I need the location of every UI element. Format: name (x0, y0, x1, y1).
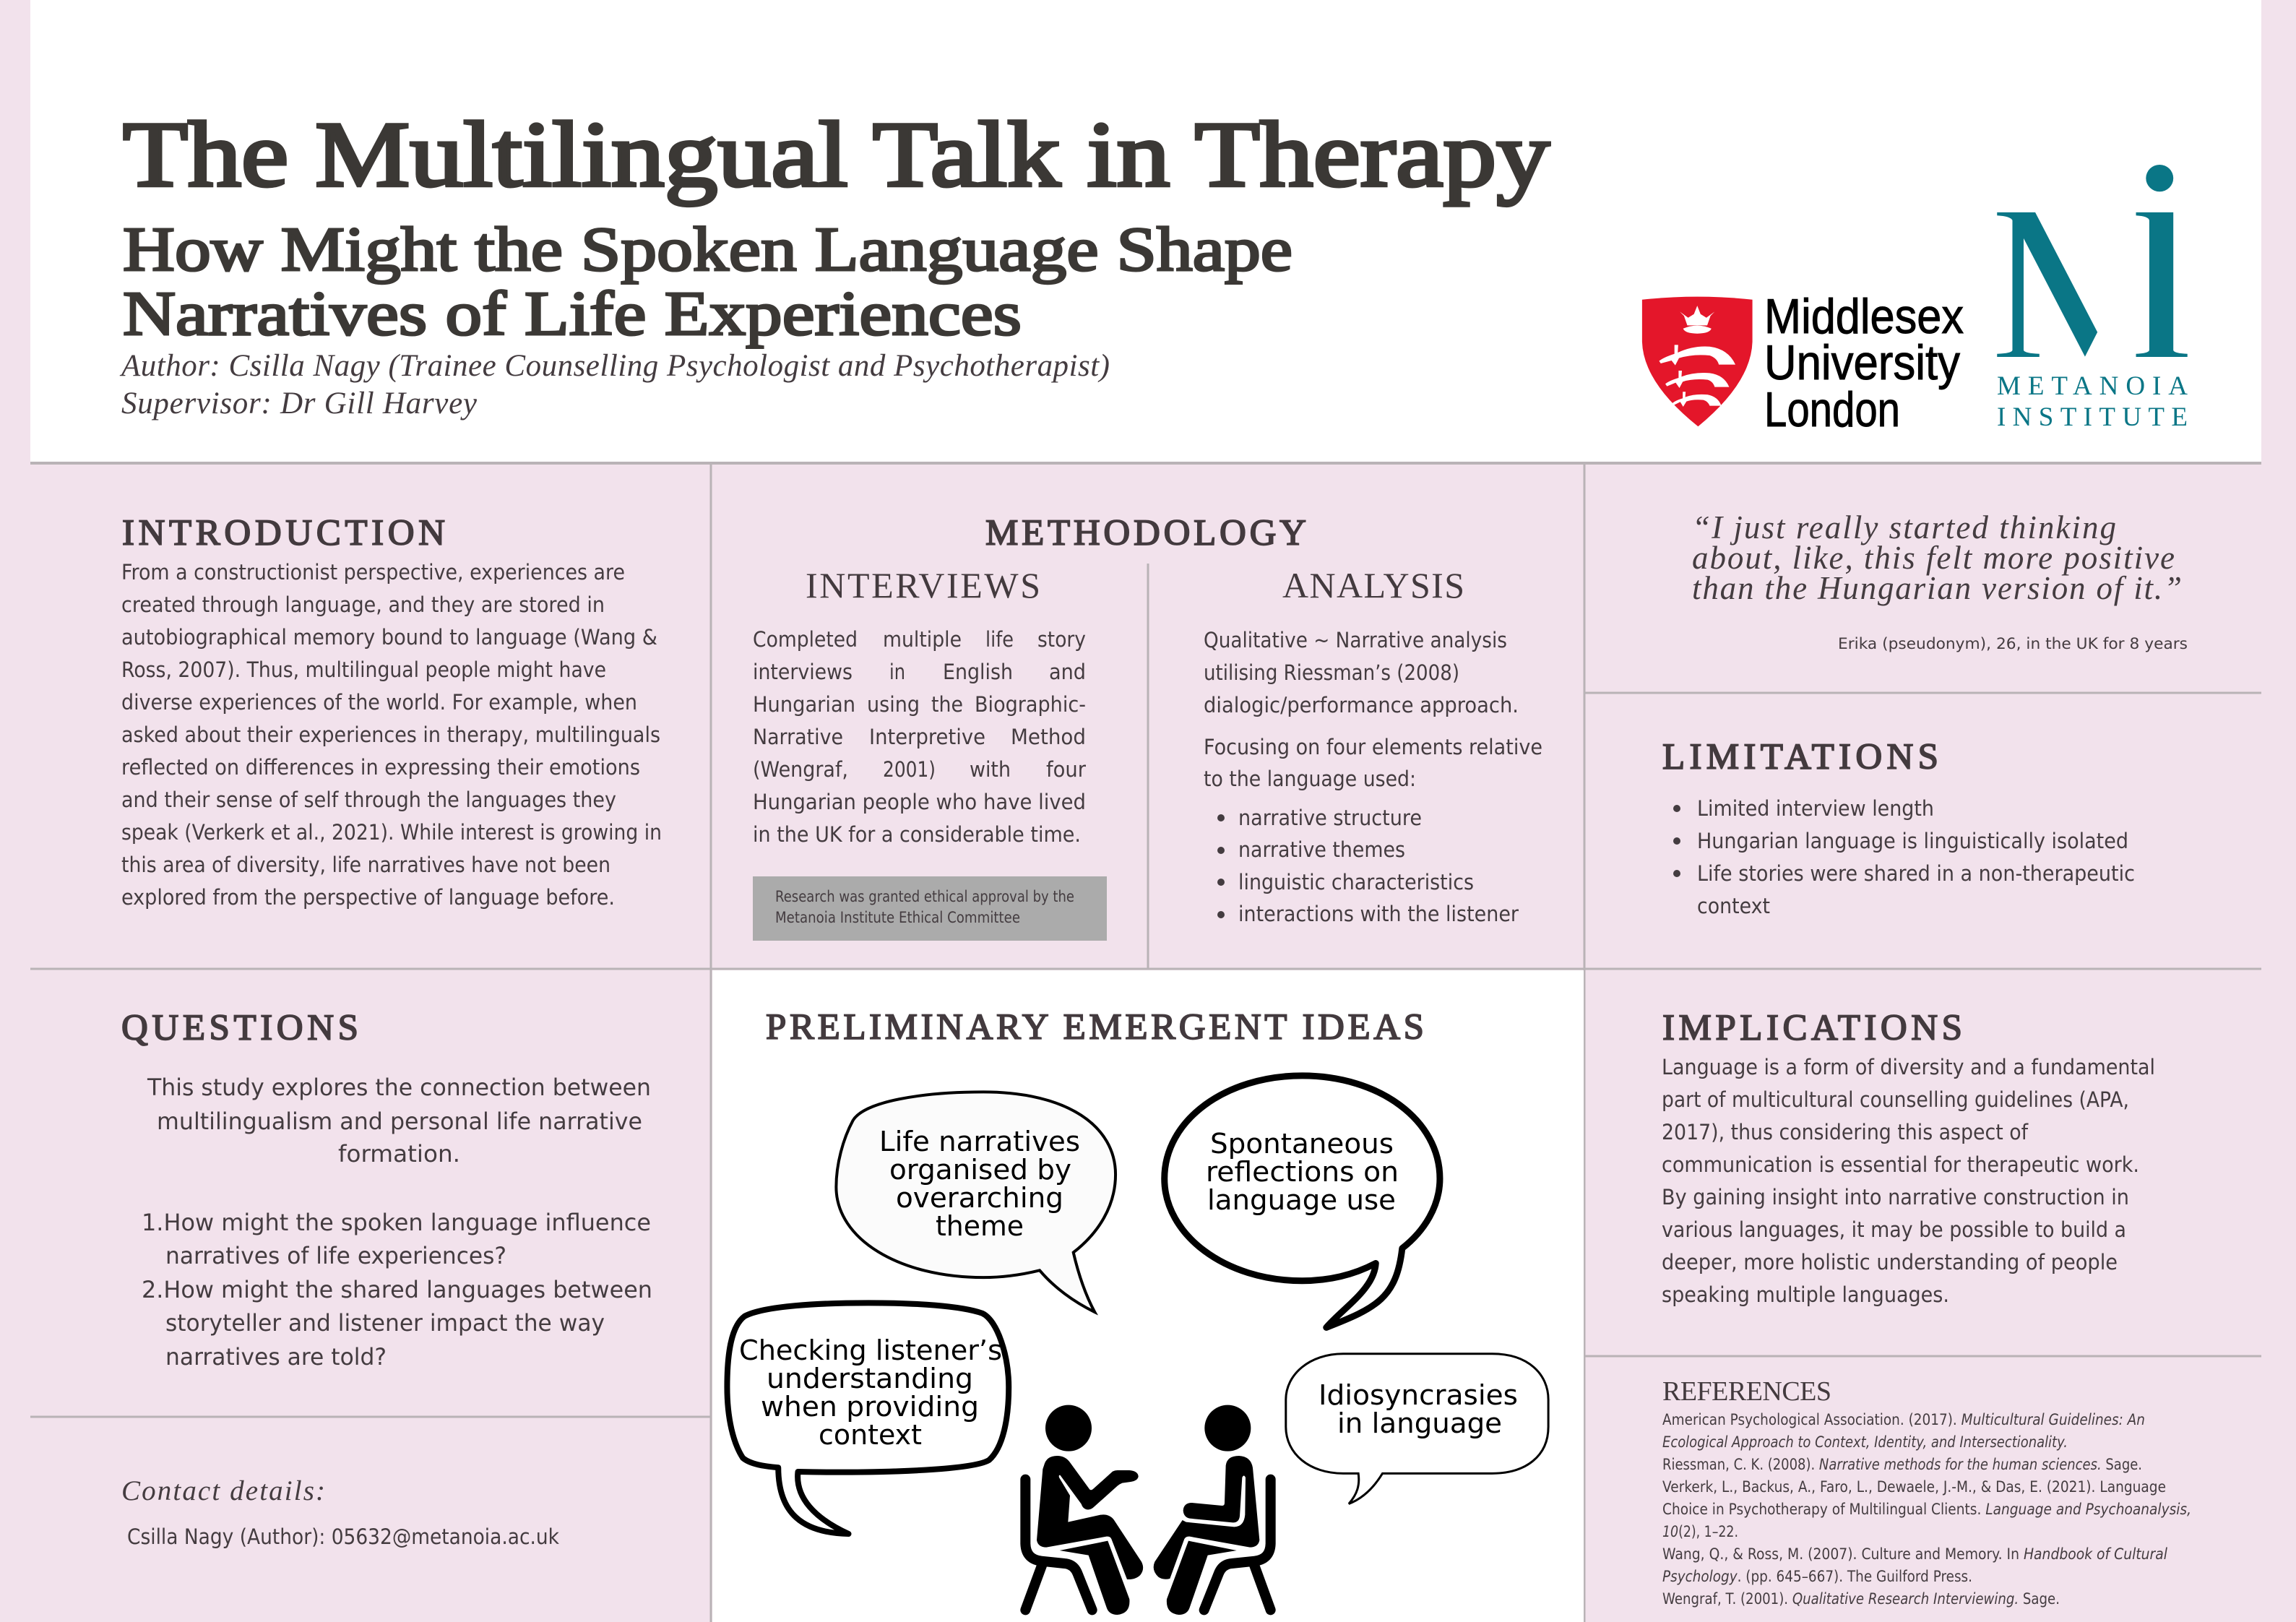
text block: interviews body: 2001) (883, 757, 936, 782)
text block: analysis body: dialogic/performance approach. (1204, 693, 1519, 717)
list: limitations: Hungarian language is linguistically isolated (1697, 829, 2128, 853)
text block: interviews body: life (985, 627, 1014, 652)
author and supervisor: Author: Csilla Nagy (Trainee Counselling Psychologist and Psychotherapist) (119, 349, 1110, 383)
panel: preliminary emergent ideas (712, 970, 1584, 1622)
text block: implications body: Language is a form of diversity and a fundamental (1662, 1055, 2155, 1079)
speech bubble: spontaneous reflections: language use (1207, 1184, 1396, 1216)
list: research questions: narratives of life experiences? (165, 1242, 506, 1269)
list: limitations: Limited interview length (1697, 796, 1934, 821)
heading: questions: QUESTIONS (121, 1008, 358, 1048)
text block: introduction body: speak (Verkerk et al., 2021). While interest is growing in (121, 820, 662, 845)
speech bubble: spontaneous reflections (1165, 1076, 1440, 1327)
text block: interviews body: using (867, 692, 920, 717)
logo: Metanoia Institute: METANOIA (1997, 371, 2188, 401)
text block: interviews body: in the UK for a considerable time. (753, 822, 1081, 847)
text block: interviews body: Biographic- (975, 692, 1086, 717)
subpanel: analysis (1204, 565, 1542, 926)
author and supervisor: Supervisor: Dr Gill Harvey (121, 387, 478, 420)
text block: analysis body (1204, 628, 1542, 791)
heading: implications: IMPLICATIONS (1662, 1008, 1962, 1048)
icon: speaking person on left (1025, 1405, 1143, 1615)
text block: interviews body: multiple (883, 627, 962, 652)
list: research questions: storyteller and listener impact the way (165, 1309, 605, 1337)
text block: analysis body: to the language used: (1204, 767, 1416, 791)
speech bubble: life narratives: Life narratives (879, 1126, 1080, 1157)
list: research questions: narratives are told? (165, 1343, 387, 1371)
text block: introduction body (121, 560, 662, 910)
text block: interviews body: interviews (753, 660, 853, 684)
list: research questions (142, 1209, 652, 1371)
speech bubble: checking listener's understanding: when providing (761, 1391, 979, 1423)
text block: interviews body: Completed (753, 627, 858, 652)
panel: methodology (753, 513, 1542, 941)
text block: interviews body: in (889, 660, 905, 684)
contact line: Csilla Nagy (Author): 05632@metanoia.ac.uk (127, 1524, 559, 1549)
text block: implications body: 2017), thus considering this aspect of (1662, 1120, 2029, 1144)
text block: introduction body: reflected on differences in expressing their emotions (121, 755, 640, 780)
text block: implications body (1662, 1055, 2155, 1307)
text block: reference list: Psychology. (pp. 645–667). The Guilford Press. (1662, 1568, 1972, 1585)
text block: reference list: Choice in Psychotherapy of Multilingual Clients. Language and Psychoanalysis, (1662, 1501, 2191, 1518)
text block: interviews body: Interpretive (869, 725, 985, 749)
header panel (30, 0, 2261, 463)
list: research questions: 2.How might the shared languages between (142, 1276, 652, 1303)
speech bubble: checking listener's understanding: Checking listener’s (739, 1334, 1002, 1366)
logo: Metanoia Institute (1997, 165, 2188, 432)
text block: interviews body: four (1046, 757, 1086, 782)
list: four elements: interactions with the listener (1238, 902, 1519, 926)
text block: implications body: deeper, more holistic understanding of people (1662, 1250, 2118, 1274)
speech bubble: idiosyncrasies (1286, 1354, 1548, 1504)
text block: interviews body: (Wengraf, (753, 757, 848, 782)
list: limitations: Life stories were shared in a non-therapeutic (1697, 861, 2135, 886)
text block: introduction body: explored from the perspective of language before. (121, 885, 615, 910)
subtitle: Narratives of Life Experiences (123, 278, 1022, 348)
text block: interviews body: and (1049, 660, 1086, 684)
quote attribution: Erika (pseudonym), 26, in the UK for 8 years (1838, 635, 2188, 652)
subpanel: interviews (753, 565, 1107, 941)
text block: introduction body: diverse experiences of the world. For example, when (121, 690, 637, 715)
panel: implications (1662, 1008, 2155, 1307)
text block: introduction body: created through language, and they are stored in (121, 592, 605, 617)
list: limitations (1673, 796, 2135, 918)
text block: implications body: various languages, it may be possible to build a (1662, 1217, 2126, 1242)
text block: reference list (1662, 1411, 2191, 1608)
text block: implications body: By gaining insight into narrative construction in (1662, 1185, 2129, 1209)
text block: implications body: speaking multiple languages. (1662, 1282, 1949, 1307)
list: four elements: narrative structure (1238, 806, 1422, 830)
quote text (1692, 509, 2182, 606)
wordmark (1764, 289, 1964, 437)
panel: contact details (121, 1475, 559, 1549)
text block: interviews body: English (943, 660, 1013, 684)
text block: analysis body: Qualitative ~ Narrative analysis (1204, 628, 1507, 652)
quote text: than the Hungarian version of it.” (1692, 570, 2182, 606)
list: research questions: 1.How might the spoken language influence (142, 1209, 651, 1236)
text block: reference list: Ecological Approach to Context, Identity, and Intersectionality. (1662, 1433, 2068, 1451)
speech bubble: life narratives: overarching (896, 1182, 1063, 1214)
speech bubble: spontaneous reflections: reflections on (1206, 1156, 1399, 1188)
text block: reference list: American Psychological Association. (2017). Multicultural Guidelines: An (1662, 1411, 2145, 1428)
text block: introduction body: From a constructionist perspective, experiences are (121, 560, 625, 584)
text block: interviews body: with (970, 757, 1011, 782)
text block: analysis body: utilising Riessman’s (2008) (1204, 660, 1459, 685)
text block: implications body: communication is essential for therapeutic work. (1662, 1152, 2139, 1177)
icon: listening person on right (1154, 1405, 1271, 1615)
title: The Multilingual Talk in Therapy (123, 103, 1550, 206)
panel: limitations (1662, 737, 2135, 918)
list: four elements: linguistic characteristics (1238, 870, 1474, 894)
list: four elements: narrative themes (1238, 837, 1405, 862)
panel: questions (121, 1008, 652, 1371)
heading: limitations: LIMITATIONS (1662, 737, 1938, 777)
logo: Middlesex University London (1642, 289, 1964, 437)
heading: introduction: INTRODUCTION (122, 513, 445, 553)
text block: introduction body: Ross, 2007). Thus, multilingual people might have (121, 657, 606, 682)
speech bubble: idiosyncrasies: Idiosyncrasies (1319, 1379, 1518, 1411)
panel: introduction (121, 513, 662, 910)
text block: reference list: 10(2), 1–22. (1662, 1523, 1738, 1540)
icon: two people seated in conversation (1025, 1405, 1271, 1615)
text block: introduction body: autobiographical memory bound to language (Wang & (121, 625, 657, 650)
speech bubble: life narratives: theme (936, 1210, 1024, 1242)
quote text: about, like, this felt more positive (1692, 540, 2175, 576)
text block: study aim (147, 1074, 651, 1168)
text block: interviews body: Method (1011, 725, 1086, 749)
text block: study aim: This study explores the connection between (147, 1074, 651, 1101)
text block: reference list: Verkerk, L., Backus, A., Faro, L., Dewaele, J.-M., & Das, E. (2021). Language (1662, 1478, 2166, 1496)
speech bubble: checking listener's understanding: context (819, 1419, 922, 1451)
text block: study aim: multilingualism and personal life narrative (157, 1108, 642, 1135)
heading: preliminary emergent ideas: PRELIMINARY EMERGENT IDEAS (766, 1007, 1424, 1048)
text block: implications body: part of multicultural counselling guidelines (APA, (1662, 1087, 2129, 1112)
text block: interviews body: story (1037, 627, 1086, 652)
text block: reference list: Wengraf, T. (2001). Qualitative Research Interviewing. Sage. (1662, 1590, 2060, 1608)
logo: Metanoia Institute: INSTITUTE (1997, 402, 2188, 432)
subtitle: How Might the Spoken Language Shape (123, 214, 1292, 284)
speech bubble: life narratives: organised by (889, 1154, 1071, 1186)
text block: study aim: formation. (338, 1140, 460, 1168)
text block: interviews body: the (931, 692, 963, 717)
heading: methodology: METHODOLOGY (985, 513, 1306, 553)
icon: red shield with crown and three seaxes (1642, 297, 1753, 426)
heading: analysis: ANALYSIS (1282, 565, 1464, 605)
list: four elements (1217, 806, 1519, 926)
quote text: “I just really started thinking (1692, 509, 2116, 545)
speech bubble: checking listener's understanding (727, 1303, 1009, 1534)
callout: ethical approval: Research was granted ethical approval by the (775, 888, 1074, 905)
author and supervisor (119, 349, 1110, 420)
speech bubble: life narratives (836, 1092, 1115, 1312)
list: limitations: context (1697, 894, 1770, 918)
wordmark: University (1764, 335, 1960, 390)
speech bubble: spontaneous reflections: Spontaneous (1210, 1128, 1394, 1160)
panel: quote (1692, 509, 2188, 652)
wordmark: Middlesex (1764, 289, 1964, 344)
text block: reference list: Wang, Q., & Ross, M. (2007). Culture and Memory. In Handbook of Cultural (1662, 1545, 2167, 1563)
callout: ethical approval: Metanoia Institute Ethical Committee (775, 909, 1020, 926)
panel: references (1662, 1376, 2191, 1608)
text block: introduction body: asked about their experiences in therapy, multilinguals (121, 722, 660, 747)
heading: interviews: INTERVIEWS (806, 565, 1040, 605)
text block: interviews body: Hungarian (753, 692, 855, 717)
heading: references: REFERENCES (1662, 1376, 1831, 1407)
text block: introduction body: and their sense of self through the languages they (121, 788, 616, 812)
speech bubble: idiosyncrasies: in language (1337, 1407, 1502, 1439)
text block: reference list: Riessman, C. K. (2008). Narrative methods for the human sciences. Sage. (1662, 1456, 2142, 1473)
text block: interviews body: Narrative (753, 725, 843, 749)
wordmark: London (1764, 382, 1900, 437)
text block: analysis body: Focusing on four elements relative (1204, 735, 1542, 759)
subtitle (123, 214, 1292, 348)
text block: interviews body (753, 627, 1086, 847)
text block: introduction body: this area of diversity, life narratives have not been (121, 853, 610, 877)
heading: contact details: Contact details: (121, 1475, 325, 1506)
speech bubble: checking listener's understanding: understanding (767, 1363, 973, 1394)
callout: ethical approval (753, 876, 1107, 941)
text block: interviews body: Hungarian people who have lived (753, 790, 1086, 814)
